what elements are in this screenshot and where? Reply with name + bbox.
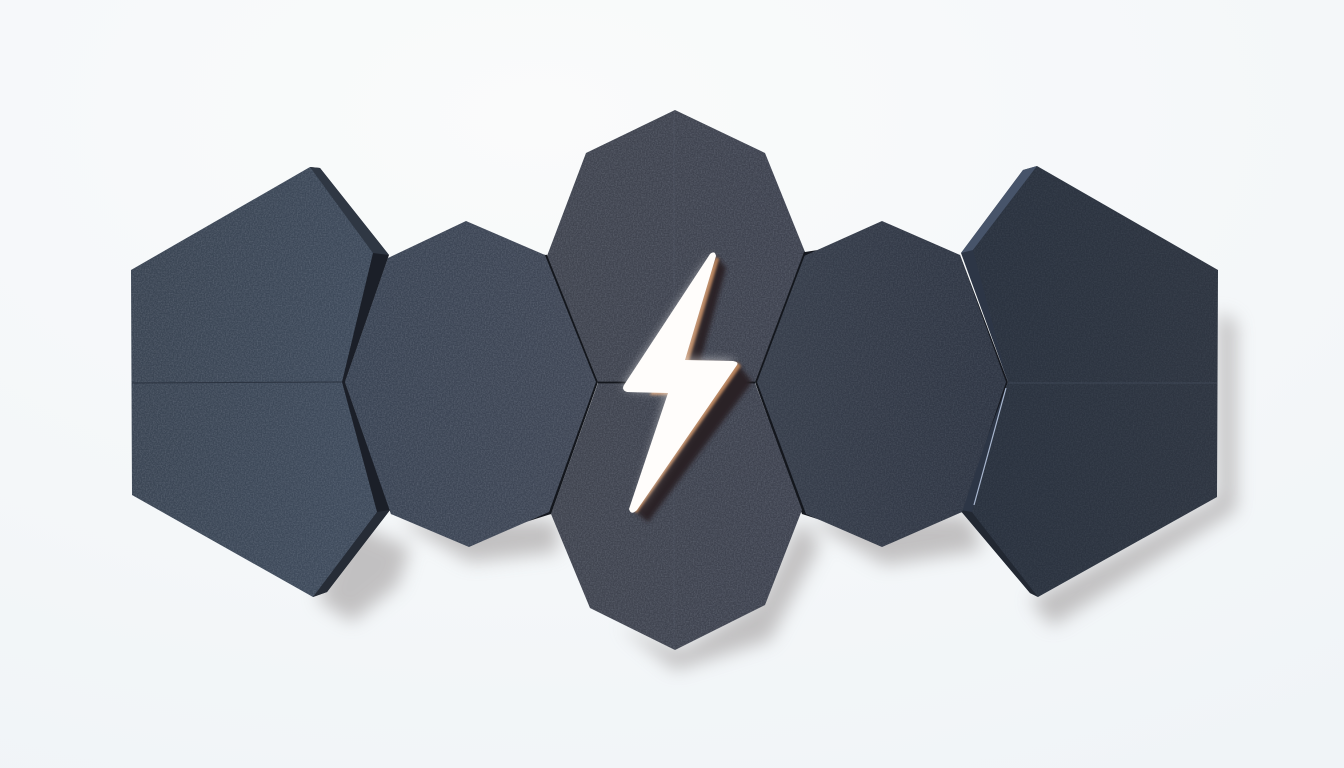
panel seams [546, 252, 805, 514]
panel: far left large hexagon [131, 167, 390, 597]
panel: centre bottom half [551, 383, 802, 650]
icon: glowing lightning bolt [623, 252, 752, 522]
panel: inner left octagon [345, 221, 596, 547]
bolt face [623, 252, 738, 513]
bolt glow [623, 253, 735, 512]
panel: inner right octagon [757, 221, 1006, 547]
bolt warm edge [633, 257, 741, 513]
cast shadows [318, 312, 1236, 670]
panel: far right large hexagon [960, 166, 1218, 597]
panel: centre top half [547, 110, 805, 382]
bolt extruded side [636, 256, 752, 522]
panel joint backing right [755, 240, 1008, 540]
panel joint backing [345, 240, 598, 540]
